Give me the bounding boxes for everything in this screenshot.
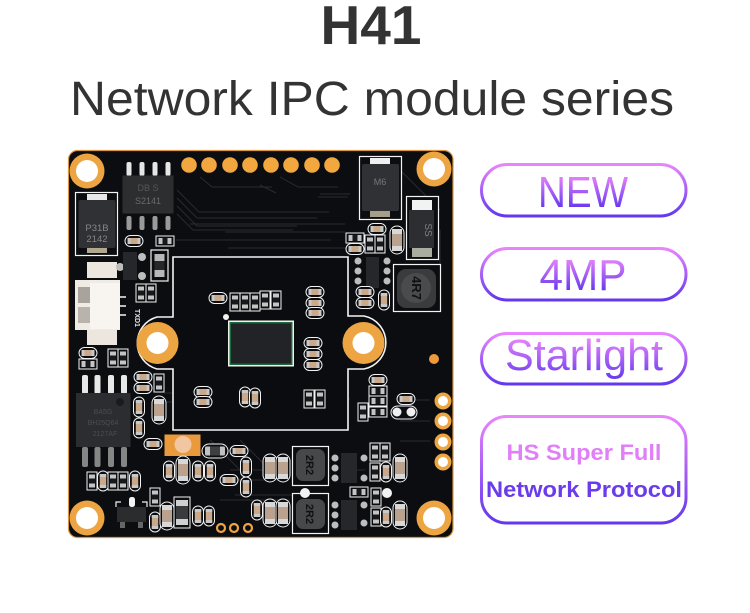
subtitle: Network IPC module series	[70, 72, 674, 126]
diode SS: SS	[422, 223, 433, 237]
small regulator chips	[116, 252, 390, 530]
badge: HS Super Full Network Protocol: HS Super Full	[506, 440, 662, 465]
left diode P31B: P31B	[85, 223, 109, 234]
diode SS	[406, 196, 438, 260]
bottom left IC: 2127AF	[93, 431, 117, 438]
top left IC	[122, 162, 174, 230]
bottom transistor	[116, 497, 147, 528]
left diode P31B: 2142	[86, 234, 108, 245]
bottom left IC: BH25Q64	[88, 420, 118, 427]
connector silkscreen label: TXD1	[133, 309, 140, 327]
silkscreen outline of sensor area	[137, 257, 386, 430]
badge: 4MP	[482, 248, 686, 300]
bottom inductors 2R2: 2R2	[303, 504, 315, 524]
right diode M6	[360, 156, 402, 220]
badge: HS Super Full Network Protocol: Network Protocol	[486, 477, 682, 502]
passive components	[79, 224, 417, 532]
orange square pad	[164, 434, 200, 456]
badge: 4MP: 4MP	[540, 251, 626, 300]
white board connector	[75, 262, 126, 345]
badge: Starlight: Starlight	[505, 331, 663, 380]
bottom inductors 2R2: 2R2	[303, 455, 315, 475]
board substrate	[68, 150, 453, 538]
top right inductor 4R7: 4R7	[409, 276, 424, 300]
right edge solder pads	[429, 354, 452, 470]
image sensor chip	[228, 320, 294, 366]
badge: NEW	[482, 164, 686, 217]
copper traces	[137, 170, 440, 500]
bottom inductors 2R2	[292, 446, 328, 534]
top right inductor 4R7	[394, 264, 440, 312]
badge: HS Super Full Network Protocol	[482, 416, 686, 523]
bottom test rings	[217, 524, 252, 532]
right diode M6: M6	[374, 177, 386, 187]
badge: NEW: NEW	[538, 168, 628, 217]
mounting holes	[70, 152, 452, 536]
top left IC: S2141	[135, 196, 161, 206]
bottom left IC: BA5G	[94, 409, 112, 416]
top left IC: DB S	[137, 183, 159, 193]
left diode P31B	[76, 192, 118, 256]
circuit board photo	[68, 150, 453, 538]
bottom left IC	[76, 375, 130, 467]
top solder pads	[181, 157, 340, 173]
